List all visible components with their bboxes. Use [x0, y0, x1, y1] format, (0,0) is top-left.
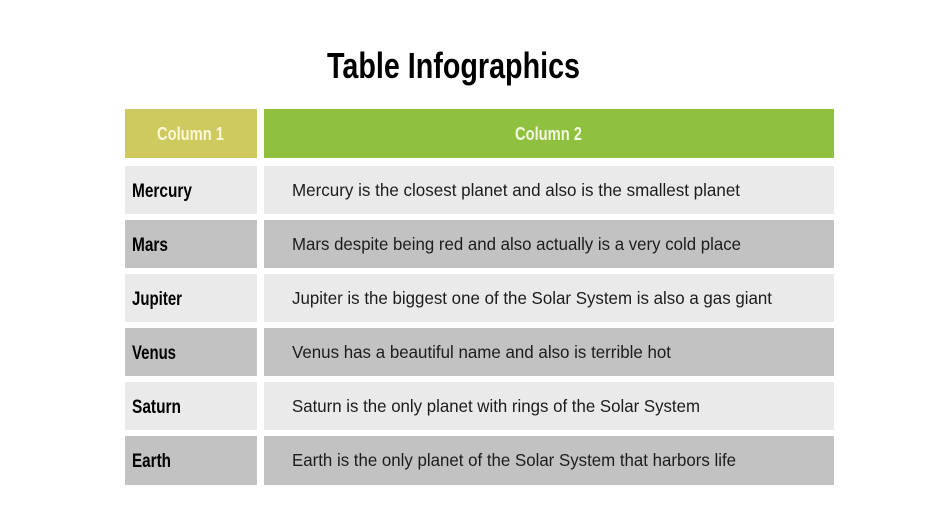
- row: Venus: Venus: [132, 342, 176, 364]
- title: Table Infographics: [327, 45, 580, 86]
- table: [125, 109, 834, 485]
- row: Mercury: [125, 166, 834, 214]
- row: Mars: Mars: [132, 234, 168, 256]
- row: Mars: Mars despite being red and also actually is a very cold place: [292, 234, 741, 254]
- row: Earth: [125, 436, 834, 485]
- row: Mercury: Mercury: [132, 180, 192, 202]
- row: Venus: Venus has a beautiful name and also is terrible hot: [292, 342, 671, 362]
- header: column 2: [264, 109, 834, 158]
- row: Jupiter: [125, 274, 834, 322]
- row: Saturn: Saturn is the only planet with rings of the Solar System: [292, 396, 700, 416]
- row: Jupiter: Jupiter is the biggest one of the Solar System is also a gas giant: [292, 288, 772, 308]
- row: Jupiter: Jupiter: [132, 288, 182, 310]
- row: Earth: Earth is the only planet of the Solar System that harbors life: [292, 450, 736, 470]
- header: column 1: [125, 109, 257, 158]
- row: Saturn: [125, 382, 834, 430]
- header: column 2: Column 2: [515, 124, 582, 144]
- row: Mars: [125, 220, 834, 268]
- row: Mercury: Mercury is the closest planet and also is the smallest planet: [292, 180, 740, 200]
- row: Venus: [125, 328, 834, 376]
- row: Earth: Earth: [132, 450, 171, 472]
- row: Saturn: Saturn: [132, 396, 181, 418]
- header: column 1: Column 1: [157, 124, 224, 144]
